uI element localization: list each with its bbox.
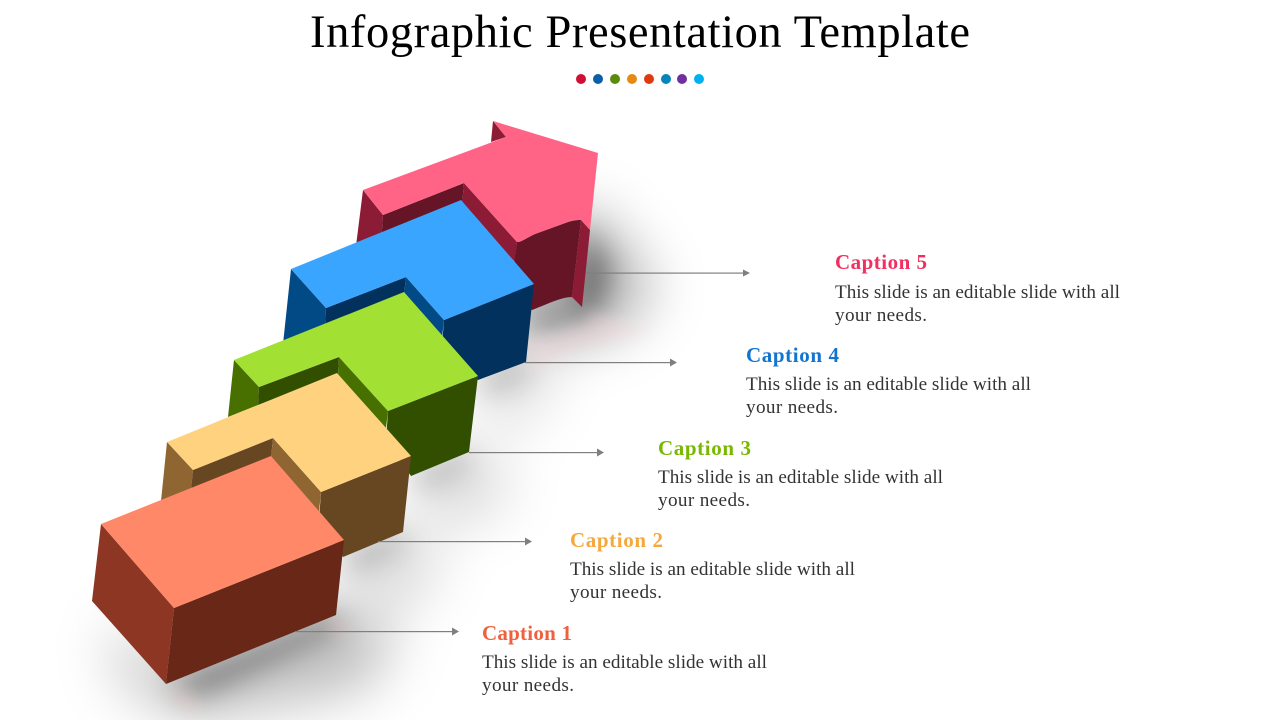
arrow segment 5: pink arrow head xyxy=(356,121,598,310)
text block: caption 5: Caption 5 xyxy=(835,250,927,274)
text block: caption 4: This slide is an editable slide with all xyxy=(746,374,1031,395)
text block: caption 2: Caption 2 xyxy=(570,528,663,552)
text block: caption 3: Caption 3 xyxy=(658,436,751,460)
text block: caption 4: your needs. xyxy=(746,397,838,418)
decorative colour dots xyxy=(576,74,704,84)
text block: caption 1: Caption 1 xyxy=(482,621,572,645)
text block: caption 1 xyxy=(482,621,767,696)
title: Infographic Presentation Template xyxy=(310,7,970,58)
arrow segment 1: orange block xyxy=(92,456,344,684)
text block: caption 4: Caption 4 xyxy=(746,343,840,367)
text block: caption 5 xyxy=(835,250,1120,326)
arrow: caption 3 leader xyxy=(469,448,604,456)
text block: caption 3 xyxy=(658,436,943,511)
text block: caption 4 xyxy=(746,343,1031,418)
text block: caption 3: This slide is an editable slide with all xyxy=(658,467,943,488)
text block: caption 2: This slide is an editable slide with all xyxy=(570,559,855,580)
arrow: caption 5 leader xyxy=(586,270,750,276)
arrow segment 2: yellow xyxy=(161,373,411,557)
text block: caption 5: your needs. xyxy=(835,305,927,326)
arrow segment 3: green xyxy=(228,292,478,476)
faint coloured reflections xyxy=(168,310,650,712)
text block: caption 2: your needs. xyxy=(570,582,662,603)
text block: caption 3: your needs. xyxy=(658,490,750,511)
arrow: caption 4 leader xyxy=(525,358,677,366)
arrow segment 4: blue xyxy=(283,200,534,380)
arrow: caption 1 leader xyxy=(295,628,459,636)
text block: caption 1: This slide is an editable slide with all xyxy=(482,652,767,673)
arrow: caption 2 leader xyxy=(378,538,532,546)
drop shadows of the stacked arrow xyxy=(110,210,655,720)
text block: caption 5: This slide is an editable slide with all xyxy=(835,282,1120,303)
text block: caption 2 xyxy=(570,528,855,603)
text block: caption 1: your needs. xyxy=(482,675,574,696)
